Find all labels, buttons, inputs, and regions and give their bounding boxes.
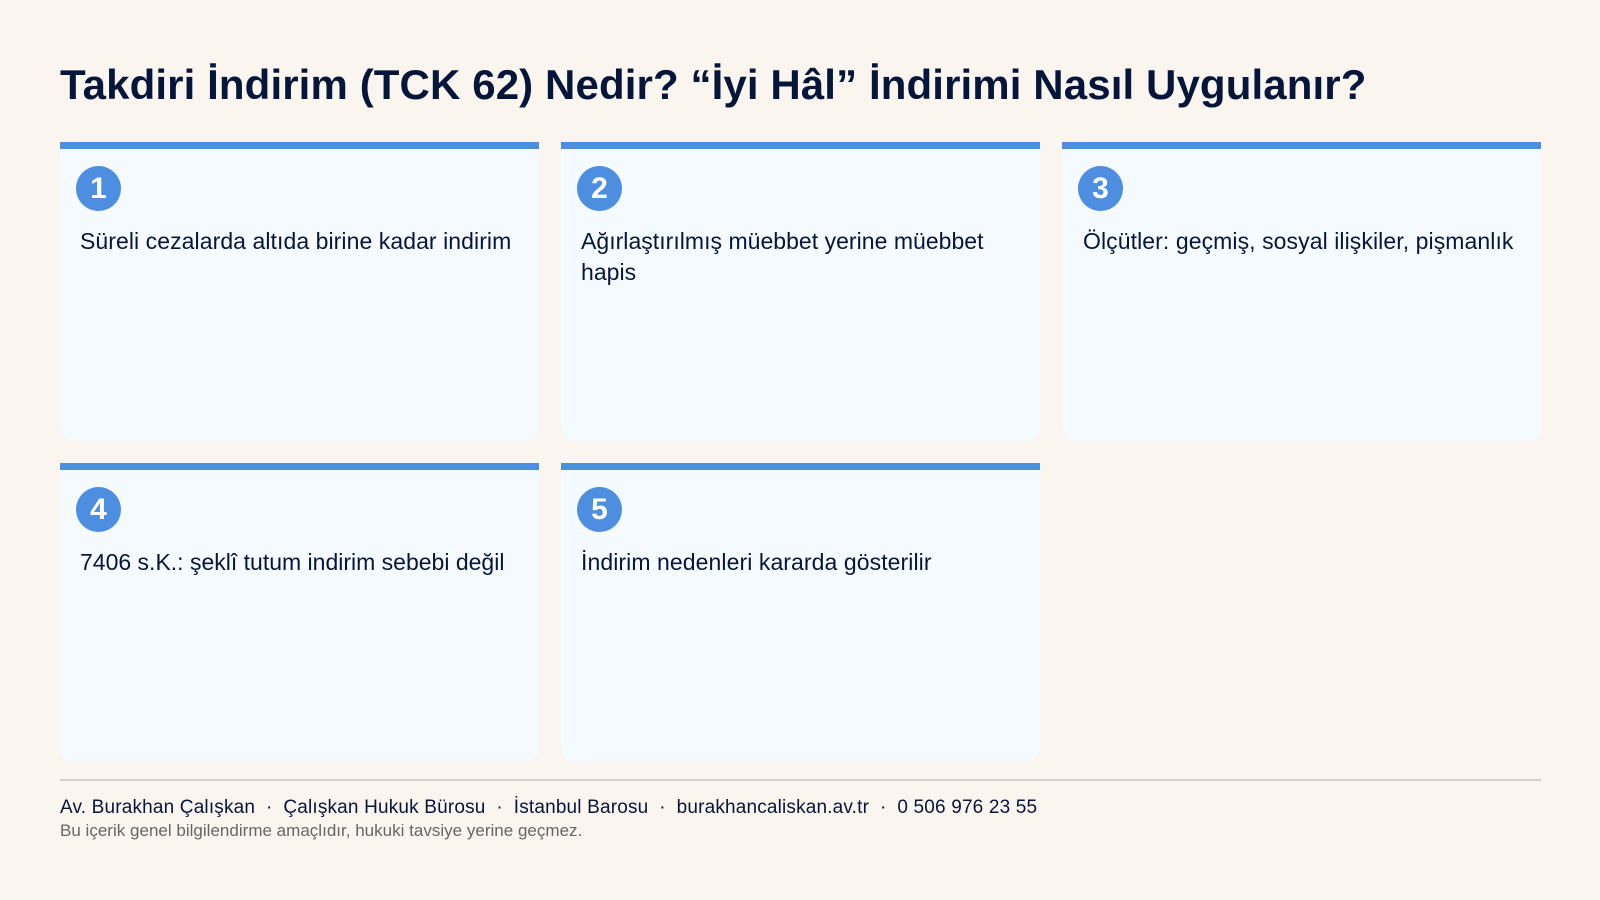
number badge 5: 5 <box>591 493 608 526</box>
number badge 5 <box>577 487 622 532</box>
number badge 4: 4 <box>90 493 107 526</box>
number badge 1: 1 <box>90 172 107 205</box>
number badge 1 <box>76 166 121 211</box>
number badge 2 <box>577 166 622 211</box>
number badge 2: 2 <box>591 172 608 205</box>
number badge 3: 3 <box>1092 172 1109 205</box>
panel: card 4 <box>60 463 539 762</box>
panel: card 2 <box>561 142 1040 440</box>
footer contact line: Av. Burakhan Çalışkan · Çalışkan Hukuk Bürosu · İstanbul Barosu · burakhancaliskan.av.tr · 0 506 976 23 55 <box>60 797 1037 818</box>
panel: card 5 <box>561 463 1040 762</box>
card 1 text: Süreli cezalarda altıda birine kadar indirim <box>80 228 511 254</box>
card 2 text: Ağırlaştırılmış müebbet yerine müebbet hapis <box>581 228 984 284</box>
panel: card 3 <box>1062 142 1541 440</box>
title: Takdiri İndirim (TCK 62) Nedir? “İyi Hâl” İndirimi Nasıl Uygulanır? <box>60 61 1366 108</box>
footer disclaimer: Bu içerik genel bilgilendirme amaçlıdır, hukuki tavsiye yerine geçmez. <box>60 821 582 840</box>
panel: card 1 <box>60 142 539 440</box>
number badge 3 <box>1078 166 1123 211</box>
card 3 text: Ölçütler: geçmiş, sosyal ilişkiler, pişmanlık <box>1083 228 1514 254</box>
card 5 text: İndirim nedenleri kararda gösterilir <box>581 549 932 575</box>
number badge 4 <box>76 487 121 532</box>
card 4 text: 7406 s.K.: şeklî tutum indirim sebebi değil <box>80 549 504 575</box>
